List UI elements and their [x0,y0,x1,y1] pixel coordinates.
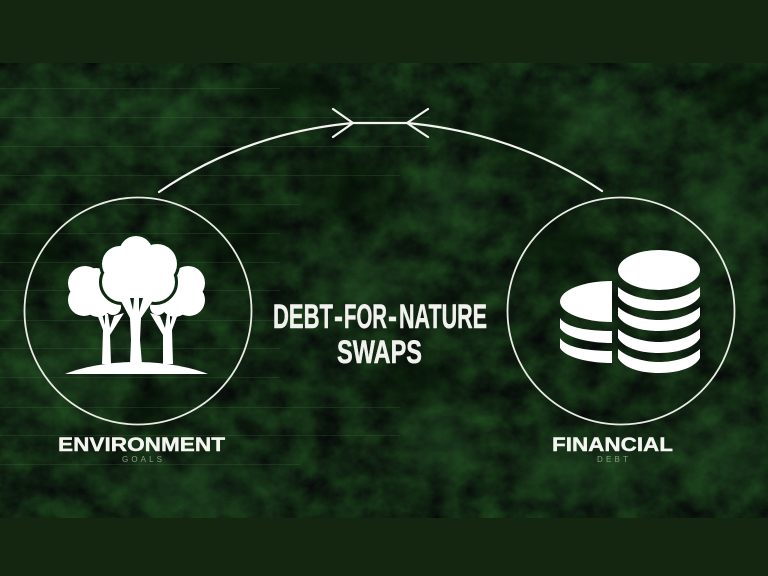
sublabel: debt: DEBT [597,455,628,464]
center tree [102,236,177,364]
sublabel: goals: GOALS [122,455,162,464]
infographic canvas [0,63,768,518]
circle: financial outline [508,198,734,424]
icon: coin stacks [560,250,700,373]
label: environment: ENVIRONMENT [58,434,225,456]
panel: financial [508,198,734,464]
right coin stack [618,250,700,373]
arrowhead: right [407,109,428,137]
left coin stack [560,281,612,363]
label: financial: FINANCIAL [552,434,673,456]
right tree [150,266,205,364]
title: debt-for-nature swaps: - [334,298,343,336]
title: debt-for-nature swaps [273,298,487,370]
title: debt-for-nature swaps: DEBT [273,298,333,336]
title: debt-for-nature swaps: NATURE [399,298,487,336]
title: debt-for-nature swaps: FOR [344,298,387,336]
arrow: curved link between environment and financial [159,109,602,192]
circle: environment outline [24,198,252,424]
title: debt-for-nature swaps: - [388,298,397,336]
arrowhead: left [333,109,353,137]
left tree [68,266,124,364]
panel: environment [24,198,252,464]
ground [65,362,208,374]
title: debt-for-nature swaps: SWAPS [337,334,422,370]
icon: three trees [65,236,208,374]
